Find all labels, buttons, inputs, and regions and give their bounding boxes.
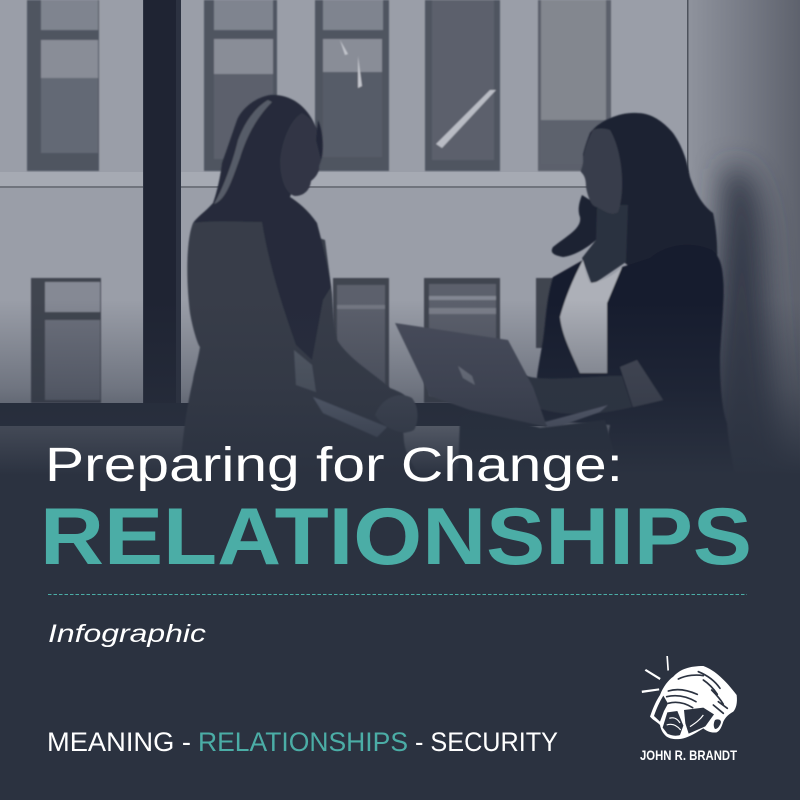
logo: John R. Brandt — [640, 656, 738, 763]
jacket — [180, 215, 420, 475]
face — [581, 128, 622, 214]
forearm — [520, 372, 632, 414]
jacket — [532, 245, 735, 475]
neck and chest — [582, 205, 628, 285]
face — [280, 113, 322, 196]
background panel — [0, 475, 800, 800]
face shadows — [654, 696, 668, 722]
title: preparing for change: Preparing for Change: — [45, 439, 623, 492]
folder and hand — [313, 397, 387, 437]
photo: building windows — [27, 0, 611, 403]
logo wordmark: JOHN R. BRANDT — [640, 748, 738, 763]
series navigation line: - SECURITY — [415, 727, 558, 757]
hand fingers — [667, 690, 697, 708]
hair strokes — [678, 672, 727, 713]
series navigation line: MEANING - — [47, 727, 191, 757]
hair — [552, 113, 717, 275]
photo: dark window mullion and sill — [0, 0, 560, 476]
photo: right wall in shadow — [687, 0, 800, 520]
photo: laptop — [395, 323, 620, 475]
photo: two women talking by a window — [0, 0, 800, 520]
icon: face-palm head — [642, 656, 737, 739]
photo: woman on the right — [520, 113, 735, 475]
sleeve cuff — [620, 360, 663, 407]
hair — [193, 95, 331, 360]
dashed divider — [48, 594, 747, 596]
title: relationships: RELATIONSHIPS — [40, 492, 752, 582]
subtitle: infographic: Infographic — [48, 620, 207, 648]
photo: woman on the left — [180, 95, 420, 475]
series navigation line — [47, 727, 558, 757]
series navigation line: RELATIONSHIPS — [198, 727, 408, 757]
shirt — [560, 260, 622, 373]
photo: dark fade into the background — [0, 300, 800, 475]
mouth and cheek lines — [667, 715, 703, 730]
